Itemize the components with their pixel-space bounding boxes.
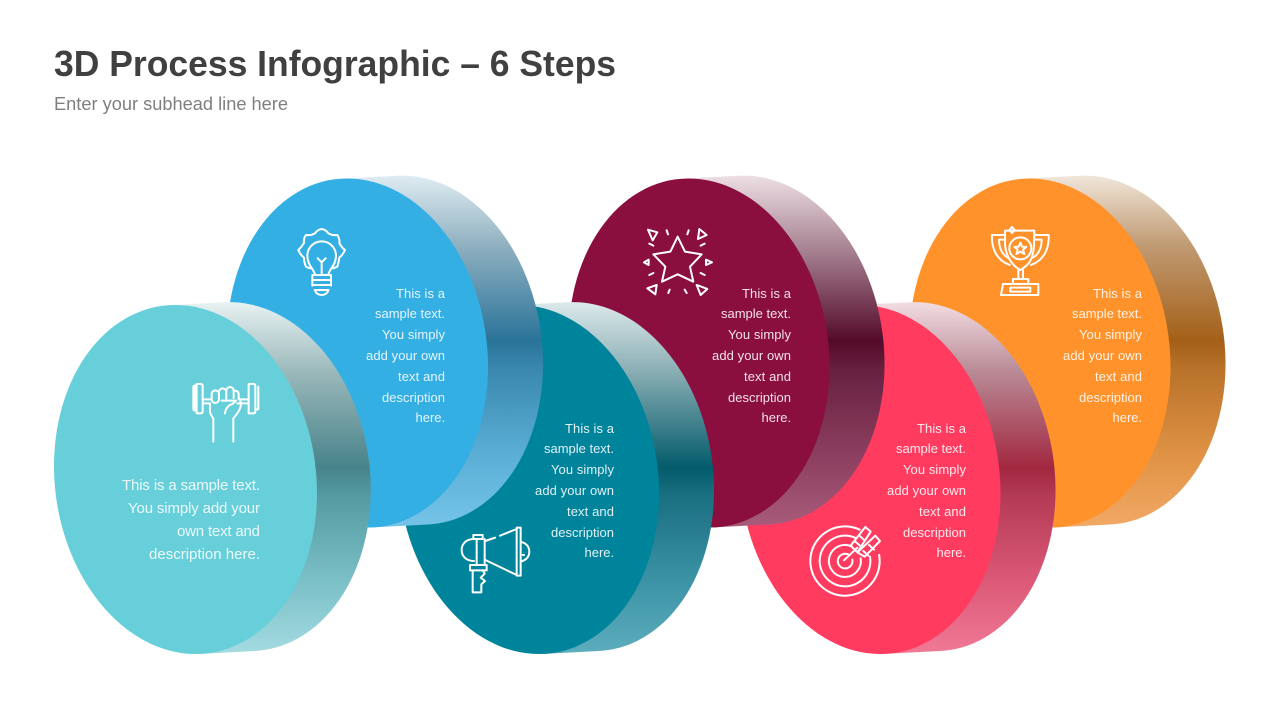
text block: description here. bbox=[149, 546, 260, 563]
title: 3D Process Infographic – 6 Steps bbox=[54, 43, 616, 84]
step 2: blue disc bbox=[206, 162, 543, 544]
text block: add your own bbox=[712, 348, 791, 363]
icon: star with sparkles bbox=[644, 229, 712, 295]
disc side bbox=[513, 302, 714, 654]
text block: add your own bbox=[887, 483, 966, 498]
text block: add your own bbox=[1063, 348, 1142, 363]
icon: target with arrow bbox=[810, 526, 880, 596]
text block: This is a bbox=[1093, 286, 1143, 301]
text block: description bbox=[728, 390, 791, 405]
text block: here. bbox=[762, 410, 791, 425]
text block: sample text. bbox=[1072, 306, 1142, 321]
text block: You simply bbox=[382, 327, 446, 342]
text block: This is a bbox=[396, 286, 446, 301]
text block: here. bbox=[1112, 410, 1142, 425]
text block: You simply bbox=[903, 462, 966, 477]
text block: sample text. bbox=[375, 306, 445, 321]
text block: description bbox=[551, 525, 614, 540]
step 4: maroon disc bbox=[548, 162, 885, 544]
text block: This is a bbox=[917, 421, 967, 436]
text block: You simply bbox=[1079, 327, 1142, 342]
icon: light bulb in gear bbox=[298, 229, 345, 295]
text block: description bbox=[382, 390, 445, 405]
text block: text and bbox=[744, 369, 791, 384]
disc side bbox=[683, 176, 885, 527]
text block bbox=[366, 286, 446, 425]
text block: add your own bbox=[535, 483, 614, 498]
text block: text and bbox=[398, 369, 445, 384]
disc side bbox=[342, 176, 543, 527]
text block bbox=[887, 421, 967, 560]
disc face bbox=[719, 289, 1021, 670]
disc face bbox=[206, 162, 509, 544]
icon: trophy bbox=[992, 227, 1049, 295]
step 3: teal disc bbox=[377, 289, 714, 670]
text block: You simply bbox=[551, 462, 614, 477]
step 5: red disc bbox=[719, 289, 1056, 670]
text block: own text and bbox=[177, 523, 260, 540]
text block bbox=[535, 421, 615, 560]
disc side bbox=[854, 302, 1056, 654]
text block: description bbox=[903, 525, 966, 540]
text block: sample text. bbox=[721, 306, 791, 321]
text block: here. bbox=[416, 410, 445, 425]
text block: sample text. bbox=[544, 441, 614, 456]
text block: add your own bbox=[366, 348, 445, 363]
text block: here. bbox=[936, 545, 966, 560]
text block: This is a bbox=[565, 421, 615, 436]
icon: megaphone bbox=[462, 528, 529, 592]
text block bbox=[122, 477, 260, 563]
disc face bbox=[33, 289, 338, 670]
text block bbox=[712, 286, 792, 425]
text block: You simply bbox=[728, 327, 792, 342]
disc face bbox=[889, 162, 1191, 544]
text block: sample text. bbox=[896, 441, 966, 456]
text block bbox=[1063, 286, 1143, 425]
text block: text and bbox=[1095, 369, 1142, 384]
text block: text and bbox=[567, 504, 614, 519]
disc face bbox=[377, 289, 680, 670]
text block: This is a sample text. bbox=[122, 477, 260, 494]
disc face bbox=[548, 162, 850, 544]
disc side bbox=[1024, 176, 1226, 527]
text block: You simply add your bbox=[128, 500, 260, 517]
disc side bbox=[170, 302, 371, 654]
text block: text and bbox=[919, 504, 966, 519]
step 1: cyan disc bbox=[33, 289, 371, 670]
icon: hand lifting dumbbell bbox=[193, 384, 258, 442]
text block: This is a bbox=[742, 286, 792, 301]
text block: description bbox=[1079, 390, 1142, 405]
step 6: orange disc bbox=[889, 162, 1226, 544]
text block: here. bbox=[584, 545, 614, 560]
subhead: Enter your subhead line here bbox=[54, 94, 288, 114]
